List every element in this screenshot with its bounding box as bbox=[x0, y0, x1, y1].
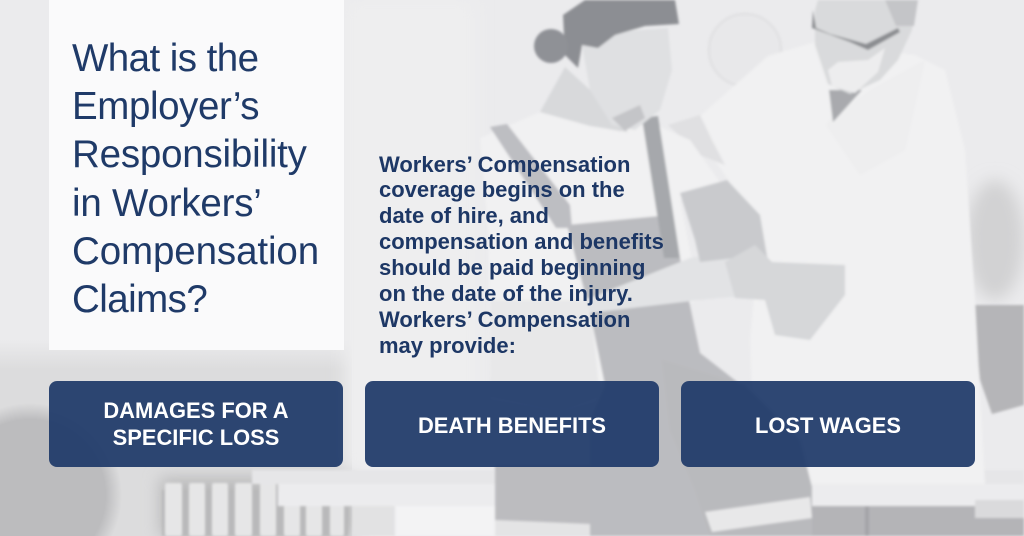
clock bbox=[709, 14, 781, 86]
title: in Workers’ bbox=[72, 182, 262, 225]
worker overalls bbox=[567, 216, 745, 536]
book shelf shadow bbox=[162, 490, 348, 536]
books bbox=[165, 483, 182, 536]
table and cushion bbox=[252, 470, 1024, 484]
title: Claims? bbox=[72, 278, 207, 321]
body text block: coverage begins on the bbox=[379, 177, 625, 202]
clasped hands bbox=[725, 245, 845, 340]
body text block: Workers’ Compensation bbox=[379, 152, 630, 176]
body text block bbox=[379, 152, 664, 358]
button: lost wages: LOST WAGES bbox=[755, 413, 901, 438]
worker hair bbox=[563, 0, 679, 68]
button: lost wages bbox=[681, 381, 975, 467]
chair bbox=[972, 305, 1024, 414]
doctor hand on shoulder bbox=[668, 115, 725, 165]
body text block: should be paid beginning bbox=[379, 255, 645, 280]
doctor coat bbox=[690, 42, 985, 484]
worker left arm and shirt bbox=[480, 112, 722, 412]
body text block: may provide: bbox=[379, 333, 516, 358]
button: damages for a specific loss bbox=[49, 381, 343, 467]
worker forearm bbox=[585, 250, 760, 313]
body text block: on the date of the injury. bbox=[379, 281, 633, 306]
doctor head bbox=[815, 0, 916, 94]
button: damages for a specific loss: SPECIFIC LOSS bbox=[113, 425, 279, 450]
worker upper arm bbox=[680, 180, 768, 262]
title: Compensation bbox=[72, 230, 319, 273]
button: damages for a specific loss: DAMAGES FOR A bbox=[103, 398, 289, 423]
doctor shirt V bbox=[829, 90, 862, 122]
button: death benefits: DEATH BENEFITS bbox=[418, 413, 606, 438]
body text block: compensation and benefits bbox=[379, 229, 664, 254]
button: death benefits bbox=[365, 381, 659, 467]
worker neck and face bbox=[540, 67, 628, 132]
body text block: date of hire, and bbox=[379, 203, 549, 228]
title: Employer’s bbox=[72, 85, 259, 128]
title: What is the bbox=[72, 37, 259, 80]
title: Responsibility bbox=[72, 133, 307, 176]
title bbox=[72, 37, 319, 321]
title panel bbox=[49, 0, 344, 350]
body text block: Workers’ Compensation bbox=[379, 307, 630, 332]
